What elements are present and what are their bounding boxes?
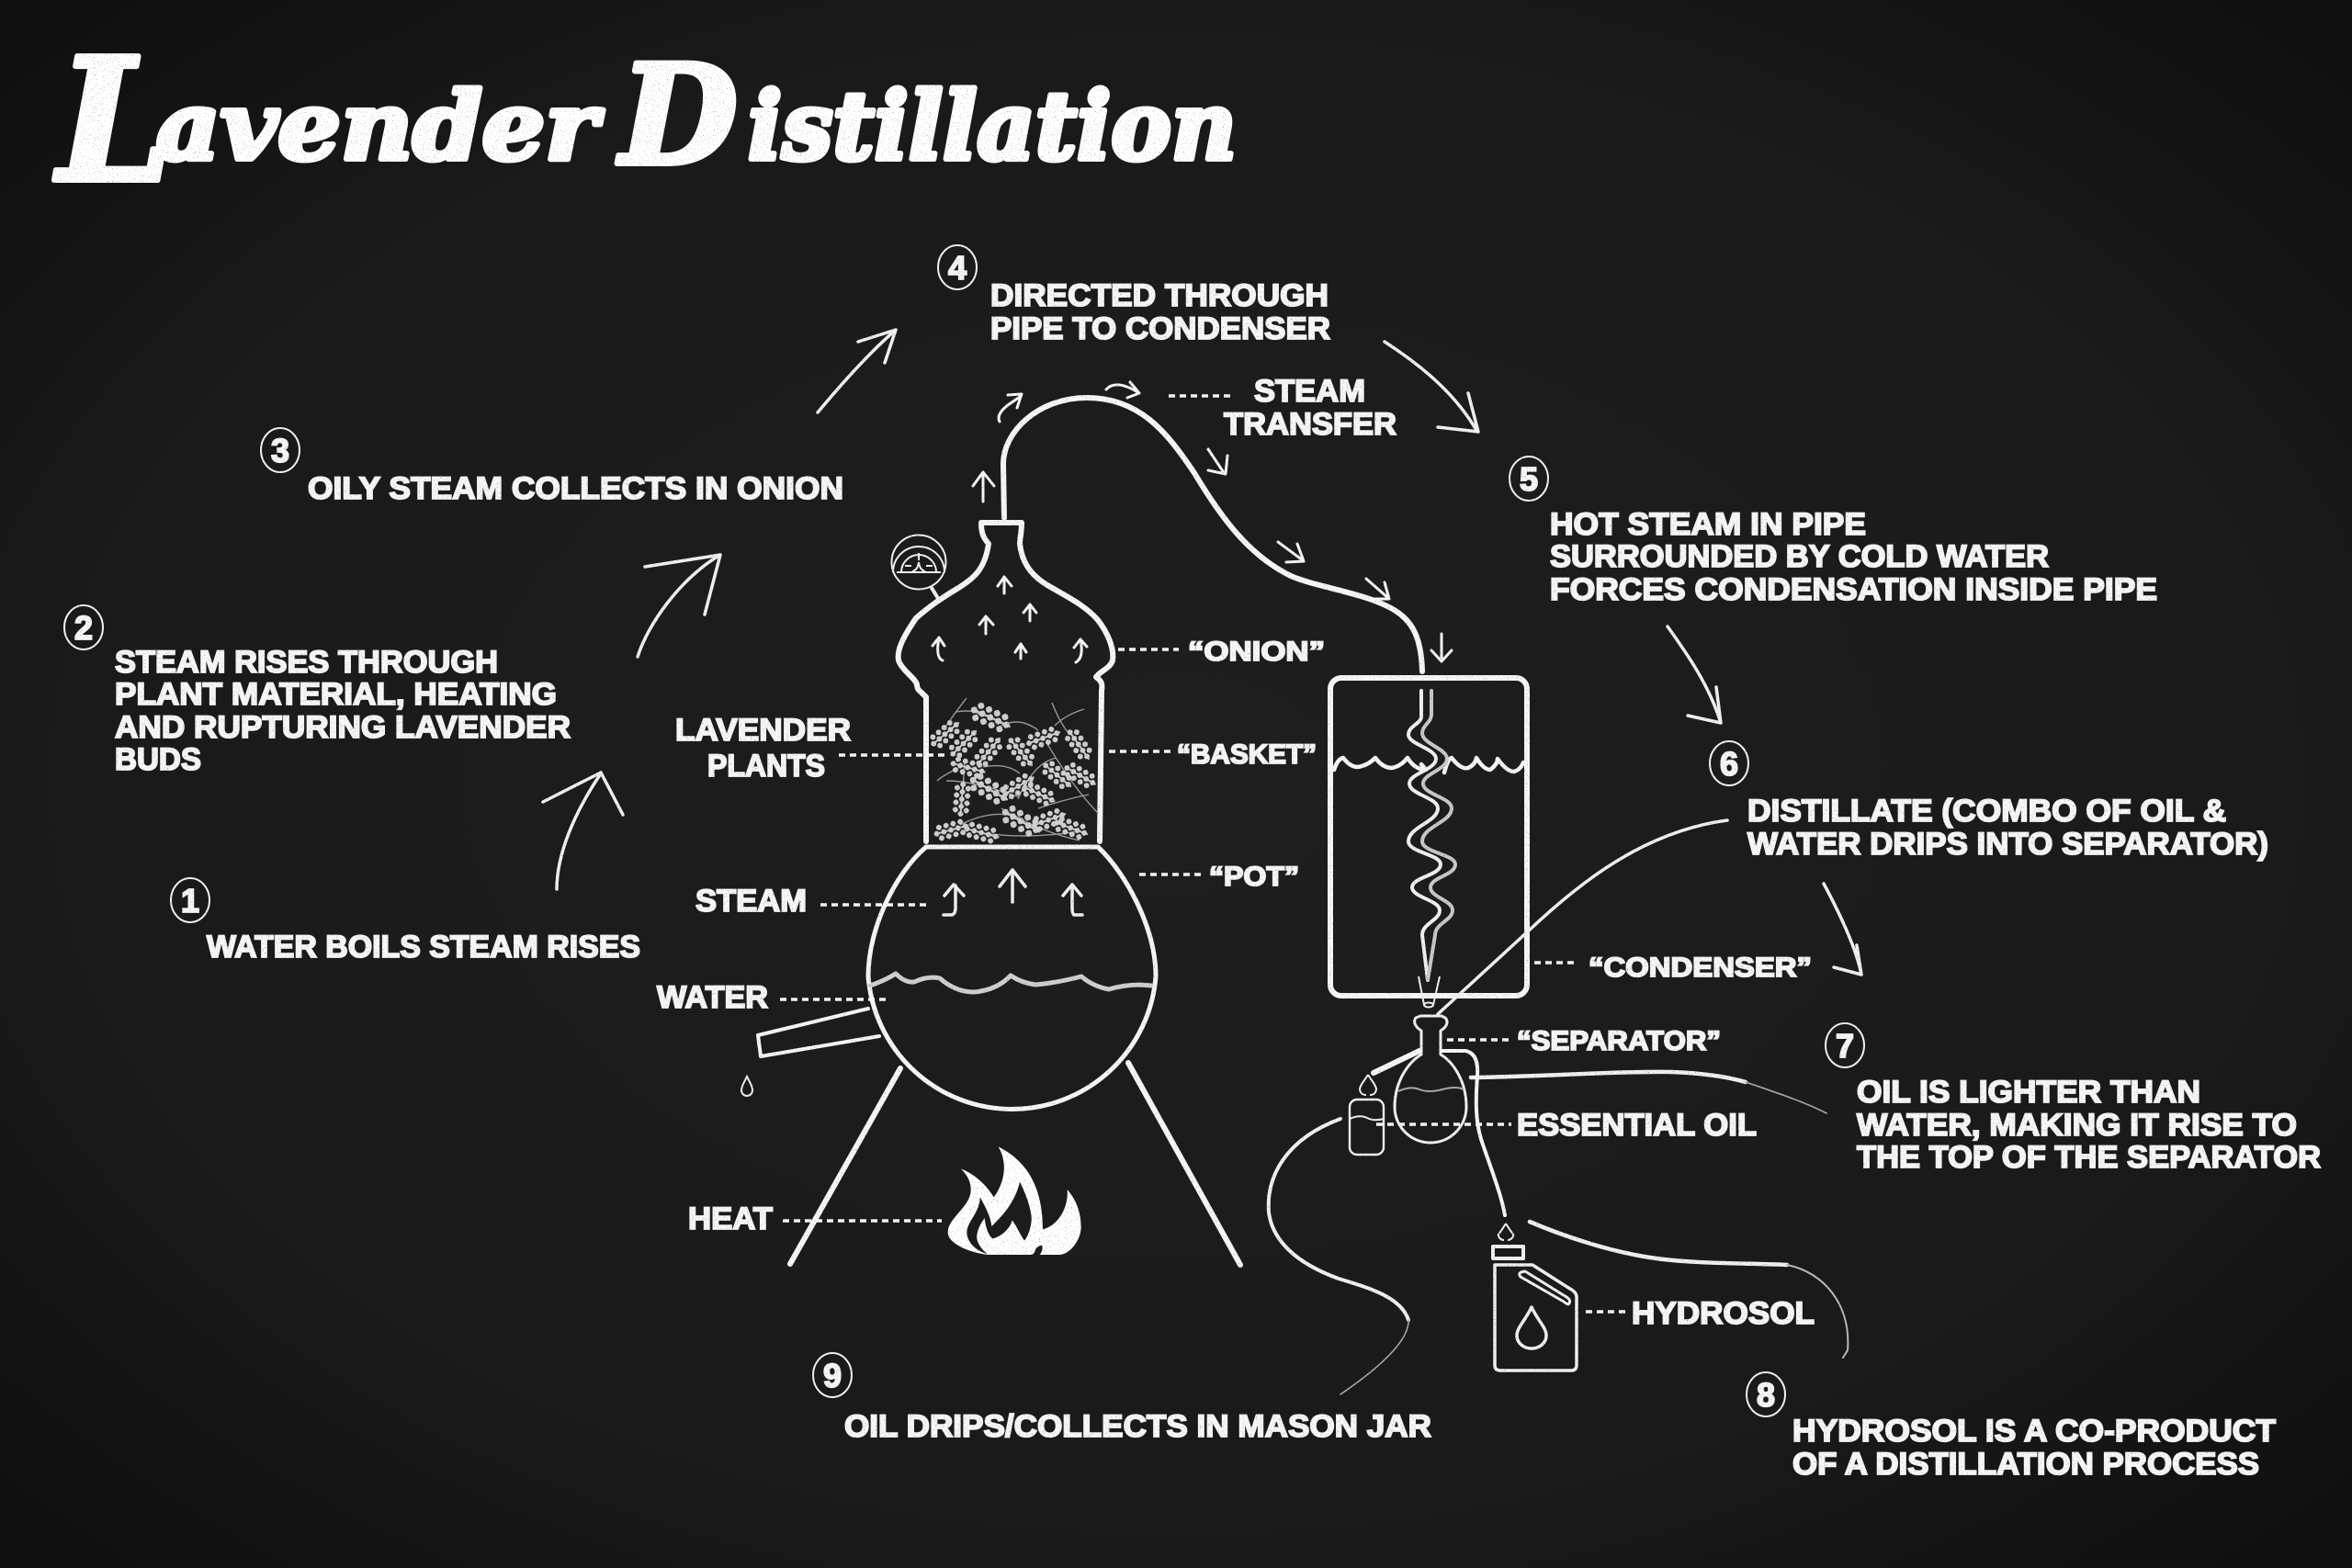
step 3 — [261, 428, 843, 506]
label: steam: STEAM — [695, 884, 807, 919]
flow arrow 3 to 4 — [818, 330, 896, 412]
label: steam transfer: TRANSFER — [1224, 407, 1396, 442]
connector: step 8 to jug — [1530, 1222, 1848, 1358]
number 1 — [171, 878, 209, 922]
label: essential oil: ESSENTIAL OIL — [1517, 1108, 1757, 1143]
icon: fire — [948, 1146, 1081, 1255]
title: istillation — [748, 72, 1237, 182]
step 6 text: DISTILLATE (COMBO OF OIL & — [1747, 794, 2226, 829]
title: L — [53, 20, 173, 220]
step 5 text: HOT STEAM IN PIPE — [1550, 507, 1866, 542]
number 3: 3 — [271, 432, 289, 469]
step 2 text: BUDS — [115, 742, 201, 777]
label: onion: “ONION” — [1188, 637, 1325, 667]
step 9 — [813, 1353, 1431, 1444]
still: steam pipe — [1003, 398, 1422, 671]
flow arrow 5 to 6 — [1668, 626, 1721, 723]
step 5 — [1510, 457, 2157, 607]
step 7 text: OIL IS LIGHTER THAN — [1857, 1075, 2200, 1110]
step 5 text — [1550, 507, 2157, 607]
number 7 — [1826, 1023, 1864, 1067]
label: hydrosol: HYDROSOL — [1632, 1296, 1815, 1331]
title: avender — [156, 72, 604, 182]
arrows along pipe — [999, 382, 1452, 661]
number 2 — [64, 605, 103, 649]
number 7: 7 — [1836, 1027, 1854, 1065]
step 5 text: FORCES CONDENSATION INSIDE PIPE — [1550, 572, 2157, 607]
label: lavender plants — [675, 713, 851, 784]
lavender plants — [926, 698, 1100, 845]
step 4 text: PIPE TO CONDENSER — [990, 311, 1330, 346]
number 4: 4 — [948, 249, 967, 287]
number 6: 6 — [1720, 745, 1738, 783]
flow arrow 4 to 5 — [1385, 342, 1478, 432]
arrows in onion — [933, 472, 1087, 662]
plant stems — [937, 698, 1098, 840]
step 9 text: OIL DRIPS/COLLECTS IN MASON JAR — [844, 1409, 1431, 1444]
stand legs — [790, 1063, 1240, 1265]
condenser water line — [1334, 758, 1523, 773]
label: basket: “BASKET” — [1177, 739, 1317, 770]
jar oil level — [1350, 1116, 1384, 1120]
step 4 text — [990, 278, 1330, 346]
connector: step 9 to mason jar — [1269, 1119, 1408, 1394]
still: pot — [868, 847, 1156, 1109]
number 5: 5 — [1520, 460, 1538, 498]
flow arrow 1 to 2 — [543, 773, 623, 889]
pressure gauge — [891, 535, 946, 600]
label: pot: “POT” — [1209, 862, 1299, 892]
step 6 — [1710, 741, 2268, 862]
hydrosol drop — [1498, 1224, 1513, 1240]
step 8 text: OF A DISTILLATION PROCESS — [1792, 1447, 2259, 1482]
jug drop — [1517, 1307, 1546, 1348]
spout — [758, 1009, 879, 1056]
number 5 — [1510, 457, 1548, 501]
step 5 text: SURROUNDED BY COLD WATER — [1550, 539, 2049, 574]
number 6 — [1710, 741, 1748, 785]
number 9 — [813, 1353, 852, 1397]
step 1 text: WATER BOILS STEAM RISES — [207, 930, 640, 964]
icon: hydrosol jug — [1493, 1247, 1577, 1371]
number 8: 8 — [1757, 1376, 1775, 1414]
step 8 text: HYDROSOL IS A CO-PRODUCT — [1792, 1414, 2276, 1449]
step 1 — [171, 878, 640, 964]
flow arrow 6 to 7 — [1824, 884, 1861, 975]
lavender buds — [926, 700, 1100, 845]
number 4 — [938, 245, 977, 289]
condenser coil — [1408, 691, 1455, 980]
part labels — [657, 374, 1815, 1331]
label: steam transfer: STEAM — [1254, 374, 1365, 409]
separator right outlet — [1442, 1051, 1505, 1215]
condenser tank — [1330, 678, 1527, 996]
step 2 text: PLANT MATERIAL, HEATING — [115, 677, 557, 712]
label: lavender plants: PLANTS — [707, 749, 825, 784]
flow arrow 2 to 3 — [638, 555, 720, 657]
step 8 text — [1792, 1414, 2276, 1482]
label: water: WATER — [657, 980, 768, 1015]
water drop — [741, 1077, 752, 1096]
label: heat: HEAT — [688, 1201, 773, 1236]
number 2: 2 — [74, 609, 93, 647]
step 4 text: DIRECTED THROUGH — [990, 278, 1329, 313]
funnel — [1419, 976, 1440, 1007]
oil level — [1398, 1088, 1464, 1091]
label: steam transfer — [1224, 374, 1396, 442]
number 1: 1 — [181, 882, 199, 919]
mason jar — [1350, 1100, 1384, 1155]
dotted leader lines — [780, 396, 1626, 1312]
still: onion and basket — [899, 523, 1113, 841]
number 9: 9 — [823, 1357, 842, 1394]
step 6 text: WATER DRIPS INTO SEPARATOR) — [1747, 827, 2268, 862]
step 8 — [1747, 1372, 2276, 1482]
number 8 — [1747, 1372, 1785, 1416]
step 2 text — [115, 645, 571, 777]
step 7 text: THE TOP OF THE SEPARATOR — [1857, 1140, 2321, 1175]
step 7 text — [1857, 1075, 2321, 1175]
step 2 — [64, 605, 571, 777]
label: lavender plants: LAVENDER — [675, 713, 851, 748]
step 7 text: WATER, MAKING IT RISE TO — [1857, 1108, 2297, 1143]
title: D — [616, 35, 738, 197]
connector: step 6 to separator — [1438, 820, 1727, 1014]
label: separator: “SEPARATOR” — [1517, 1026, 1721, 1056]
step 2 text: STEAM RISES THROUGH — [115, 645, 498, 680]
connector: step 7 to separator — [1471, 1072, 1826, 1113]
separator flask — [1395, 1016, 1466, 1143]
step 6 text — [1747, 794, 2268, 862]
step 3 text: OILY STEAM COLLECTS IN ONION — [308, 471, 843, 506]
number 3 — [261, 428, 300, 472]
step 4 — [938, 245, 1330, 346]
separator left outlet — [1374, 1051, 1419, 1073]
label: condenser: “CONDENSER” — [1589, 953, 1812, 983]
arrows in pot — [944, 870, 1082, 915]
step 2 text: AND RUPTURING LAVENDER — [115, 710, 571, 745]
step 7 — [1826, 1023, 2321, 1175]
water surface — [870, 974, 1151, 992]
oil drop — [1360, 1075, 1376, 1095]
